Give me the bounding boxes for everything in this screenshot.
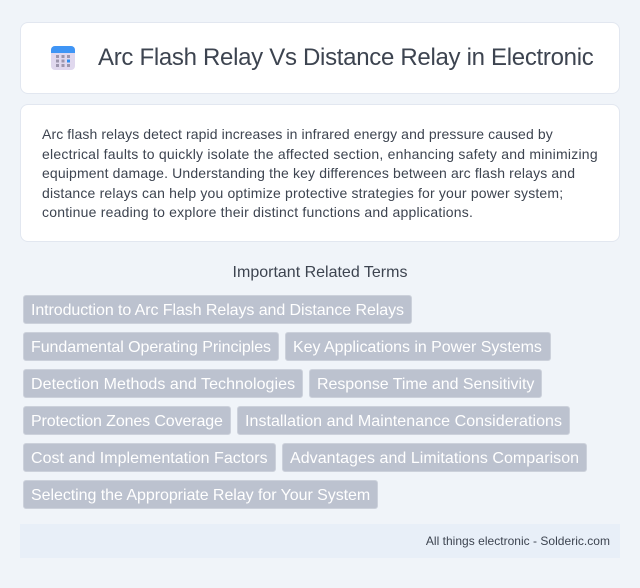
tag: Detection Methods and Technologies <box>31 376 295 393</box>
tag: Installation and Maintenance Considerations <box>245 413 562 430</box>
tag: Fundamental Operating Principles <box>31 339 271 356</box>
tag: Introduction to Arc Flash Relays and Distance Relays <box>31 302 404 319</box>
tag <box>309 369 542 398</box>
intro paragraph: electrical faults to quickly isolate the affected section, enhancing safety and minimizing <box>42 146 598 162</box>
related terms heading: Important Related Terms <box>233 264 407 281</box>
icon: calendar grid <box>51 46 75 70</box>
intro paragraph <box>42 126 598 220</box>
tag: Protection Zones Coverage <box>31 413 223 430</box>
title card <box>20 22 620 94</box>
tag: Selecting the Appropriate Relay for Your System <box>31 487 370 504</box>
tag <box>23 406 231 435</box>
intro text panel <box>20 104 620 242</box>
tag <box>23 443 276 472</box>
intro paragraph: distance relays can help you optimize protective strategies for your power system; <box>42 185 563 201</box>
title: Arc Flash Relay Vs Distance Relay in Electronic <box>98 44 593 71</box>
tag: Advantages and Limitations Comparison <box>290 450 579 467</box>
footer credit: All things electronic - Solderic.com <box>426 534 610 548</box>
intro paragraph: continue reading to explore their distinct functions and applications. <box>42 204 473 220</box>
tag <box>282 443 587 472</box>
tag <box>23 295 412 324</box>
tag: Key Applications in Power Systems <box>293 339 542 356</box>
tag <box>23 332 279 361</box>
tag: Cost and Implementation Factors <box>31 450 268 467</box>
intro paragraph: equipment damage. Understanding the key differences between arc flash relays and <box>42 165 575 181</box>
related term tags <box>23 295 587 509</box>
tag: Response Time and Sensitivity <box>317 376 534 393</box>
intro paragraph: Arc flash relays detect rapid increases in infrared energy and pressure caused by <box>42 126 553 142</box>
tag <box>237 406 570 435</box>
footer bar <box>20 524 620 558</box>
tag <box>23 480 378 509</box>
tag <box>23 369 303 398</box>
tag <box>285 332 551 361</box>
